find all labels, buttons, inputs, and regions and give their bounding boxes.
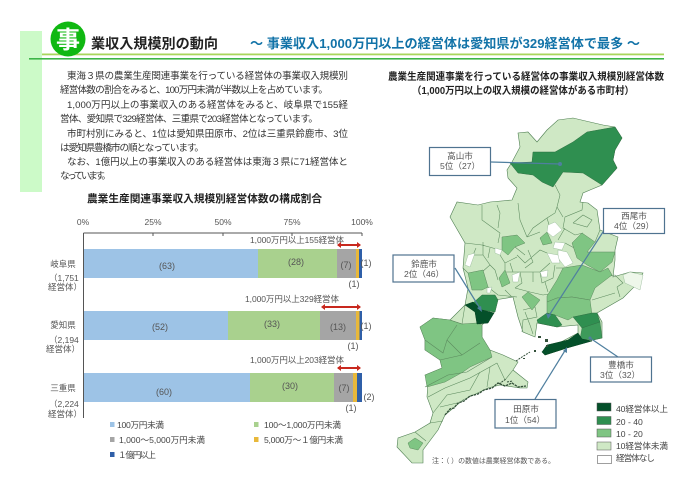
callout: Takayama: 5位（27） [440, 160, 480, 171]
40+ municipalities: Suzuka and Tahara [465, 302, 592, 355]
header rules [29, 54, 664, 60]
callout: Takayama: 高山市 [447, 150, 473, 161]
axis and percent labels: 50% [214, 217, 232, 227]
bar: Mie: (2) [364, 392, 375, 402]
bar: Gifu: 経営体） [48, 282, 82, 292]
chart legend: 100～1,000万円未満 [264, 419, 341, 430]
map legend [597, 403, 668, 464]
bar: Aichi [46, 294, 372, 354]
intro text block: なお、1億円以上の事業収入のある経営体は東海３県に71経営体と [67, 156, 348, 168]
stacked bar chart [46, 217, 375, 419]
intro text block: 経営体数の割合をみると、100万円未満が半数以上を占めています。 [60, 84, 328, 96]
bar: Gifu: (1) [348, 279, 360, 289]
axis and percent labels: 0% [77, 217, 90, 227]
intro text block [60, 70, 348, 182]
map note: 注：（ ）の数値は農業経営体数である。 [432, 456, 555, 465]
bar: Gifu: (28) [288, 257, 304, 267]
chart legend: 1,000～5,000万円未満 [119, 434, 205, 445]
bar: Mie: (1) [346, 403, 357, 413]
chart legend: 5,000万～１億円未満 [264, 434, 343, 445]
bar: Aichi: 1,000万円以上329経営体 [245, 294, 339, 304]
callout: Tahara [495, 347, 567, 428]
bar: Mie: (60) [156, 387, 172, 397]
bar: Aichi: 経営体） [46, 344, 80, 354]
callout: Suzuka: 2位（46） [404, 268, 444, 279]
side band [20, 31, 42, 192]
bar: Gifu: (7) [340, 260, 352, 270]
callout: Takayama [430, 148, 562, 176]
map legend: 40経営体以上 [616, 403, 668, 414]
municipalities without farms [465, 222, 643, 293]
bar: Gifu: (63) [159, 261, 175, 271]
Takayama, 20-40 [510, 127, 622, 187]
bar: Gifu [48, 235, 372, 292]
axis and percent labels [77, 217, 373, 418]
callout: Nishio: 西尾市 [621, 210, 647, 221]
bar: Mie: (30) [282, 381, 298, 391]
bar: Aichi: (52) [152, 322, 168, 332]
chart legend [110, 419, 343, 460]
bar: Aichi: (1) [348, 341, 359, 351]
axis and percent labels: 25% [144, 217, 162, 227]
bay islands [523, 336, 548, 359]
bar: Mie [48, 355, 375, 419]
callout: Suzuka: 鈴鹿市 [411, 258, 437, 269]
callout: Toyohashi [588, 336, 652, 382]
callout: Suzuka [393, 255, 482, 312]
intro text block: なっています。 [60, 171, 111, 182]
callout: Toyohashi: 3位（32） [600, 369, 640, 380]
intro text block: 市町村別にみると、1位は愛知県田原市、2位は三重県鈴鹿市、3位 [67, 128, 348, 140]
subtitle: ～ 事業収入1,000万円以上の経営体は愛知県が329経営体で最多 ～ [250, 36, 640, 51]
bar: Mie: (7) [338, 383, 350, 393]
chart legend: 100万円未満 [117, 419, 164, 430]
bar: Mie: 経営体） [48, 409, 82, 419]
title: 事 [56, 27, 80, 54]
title: 業収入規模別の動向 [91, 36, 218, 52]
bar: Mie: 三重県 [50, 383, 76, 393]
callout: Nishio [546, 208, 664, 319]
region base outline [397, 118, 643, 463]
bar: Gifu: （1,751 [49, 273, 79, 283]
bar: Mie: （2,224 [49, 399, 79, 409]
map legend: 10 - 20 [616, 429, 643, 439]
bar: Gifu: 1,000万円以上155経営体 [250, 235, 344, 245]
20-40 municipalities [473, 295, 602, 340]
map legend: 10経営体未満 [616, 440, 668, 451]
title [50, 22, 218, 56]
bar: Aichi: (1) [360, 321, 372, 331]
callout: Tahara: 1位（54） [505, 414, 545, 425]
map title: （1,000万円以上の収入規模の経営体がある市町村） [412, 84, 634, 97]
map title [388, 70, 664, 97]
callout: Tahara: 田原市 [513, 403, 539, 414]
axis and percent labels: 75% [283, 217, 301, 227]
chart title: 農業生産関連事業収入規模別経営体数の構成割合 [87, 192, 323, 205]
map legend: 20 - 40 [616, 417, 643, 427]
choropleth map [397, 118, 643, 463]
map title: 農業生産関連事業を行っている経営体の事業収入規模別経営体数 [388, 70, 664, 83]
axis and percent labels: 100% [351, 217, 373, 227]
intro text block: 東海３県の農業生産関連事業を行っている経営体の事業収入規模別 [67, 70, 348, 82]
chart legend: １億円以上 [118, 449, 156, 460]
bar: Aichi: （2,194 [49, 335, 79, 345]
callout: Nishio: 4位（29） [614, 220, 654, 231]
10-20 municipalities [408, 232, 615, 450]
bar: Aichi: (33) [264, 319, 280, 329]
south Mie boundaries and rugged coast [415, 305, 530, 441]
intro text block: 営体、愛知県で329経営体、三重県で203経営体となっています。 [60, 113, 318, 125]
intro text block: は愛知県豊橋市の順となっています。 [60, 142, 204, 154]
bar: Mie: 1,000万円以上203経営体 [250, 355, 344, 365]
bar: Gifu: (1) [360, 258, 372, 268]
bar: Aichi: 愛知県 [50, 320, 76, 330]
municipal boundaries [463, 185, 623, 334]
map legend: 経営体なし [616, 452, 655, 463]
bar: Aichi: (13) [330, 322, 346, 332]
bar: Gifu: 岐阜県 [50, 259, 76, 269]
callout: Toyohashi: 豊橋市 [608, 359, 634, 370]
intro text block: 1,000万円以上の事業収入のある経営体をみると、岐阜県で155経 [67, 99, 348, 111]
